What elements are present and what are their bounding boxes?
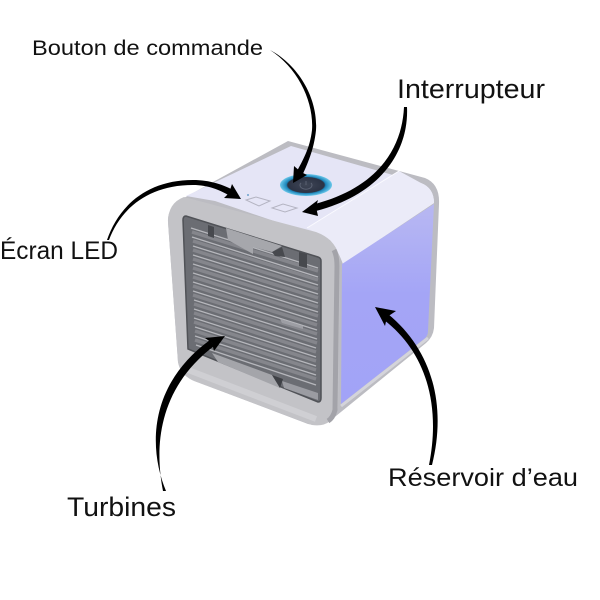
label: Écran LED: Écran LED (0, 236, 118, 265)
small side tab (280, 319, 303, 329)
arrow: Turbines (156, 336, 225, 491)
LED screen dots (238, 194, 249, 199)
upper grill dark blocks (208, 225, 307, 268)
power button (280, 174, 332, 196)
front grey frame (168, 197, 340, 425)
label: Bouton de commande: Bouton de commande (32, 37, 263, 60)
device body silhouette (168, 141, 439, 425)
grill: louvres (183, 216, 321, 402)
label: Interrupteur: Interrupteur (397, 74, 545, 104)
arrow: Écran LED (107, 180, 241, 240)
device: portable air cooler (168, 141, 439, 425)
side lower edge (341, 338, 428, 406)
label: Turbines: Turbines (67, 492, 176, 522)
arrow: Bouton de commande (270, 50, 316, 183)
upper deflector tab (226, 228, 282, 254)
top white panel (186, 146, 434, 264)
lower right tray ribs (282, 381, 318, 400)
mode button (272, 204, 297, 212)
power glyph (300, 181, 312, 189)
arrow: Réservoir d'eau (375, 307, 438, 465)
frame bottom shade (183, 368, 316, 419)
louvre lines (191, 228, 318, 385)
top panel seam (307, 171, 399, 228)
lower grill tray (212, 353, 280, 388)
frame right dark stripe (328, 250, 337, 421)
louvre shading (192, 232, 318, 379)
reservoir: blue side panel (341, 204, 434, 404)
label: Réservoir d'eau: Réservoir d’eau (388, 464, 578, 492)
arrow: Interrupteur (302, 107, 407, 216)
tray dark notch (272, 375, 283, 388)
top panel front strip (307, 171, 434, 264)
fan speed button (246, 197, 270, 206)
